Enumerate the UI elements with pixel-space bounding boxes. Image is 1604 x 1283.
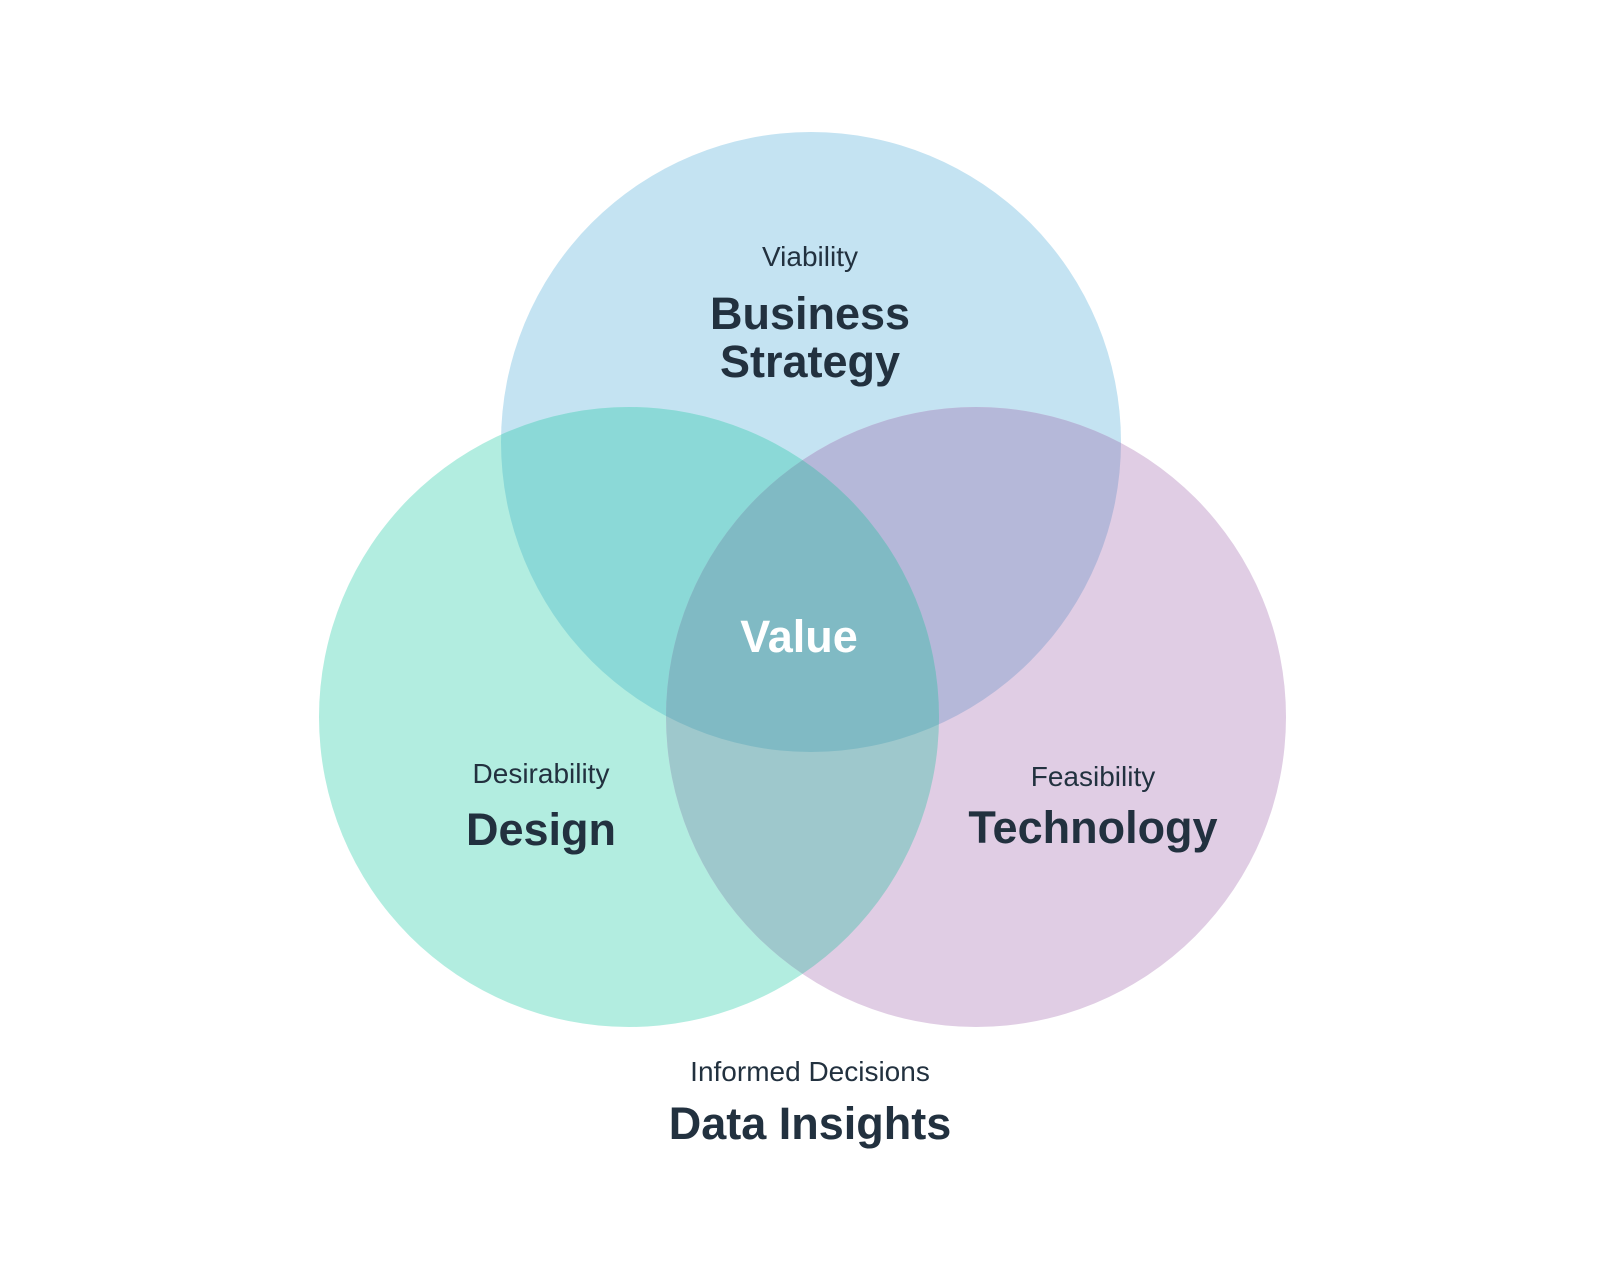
venn diagram <box>319 132 1286 1027</box>
overlap: top-right <box>802 407 1121 724</box>
label: technology: Technology <box>968 802 1218 853</box>
label: business strategy: Business <box>710 288 910 339</box>
label: business strategy: Strategy <box>720 336 900 387</box>
circle: design <box>319 407 939 1027</box>
label: data insights <box>669 1056 951 1149</box>
circle: technology <box>666 407 1286 1027</box>
label: design: Desirability <box>473 758 609 789</box>
overlap: left-right <box>666 716 939 974</box>
label: business strategy: Viability <box>762 241 858 272</box>
overlap: center <box>666 460 939 752</box>
overlap: top-left <box>501 407 802 716</box>
label: design: Design <box>466 804 616 855</box>
label: data insights: Informed Decisions <box>690 1056 930 1087</box>
label: business strategy <box>710 241 910 387</box>
label: design <box>466 758 616 855</box>
label: technology: Feasibility <box>1031 761 1155 792</box>
circle: business strategy <box>501 132 1121 752</box>
label: technology <box>968 761 1218 853</box>
label: value: Value <box>740 611 858 662</box>
label: data insights: Data Insights <box>669 1098 951 1149</box>
